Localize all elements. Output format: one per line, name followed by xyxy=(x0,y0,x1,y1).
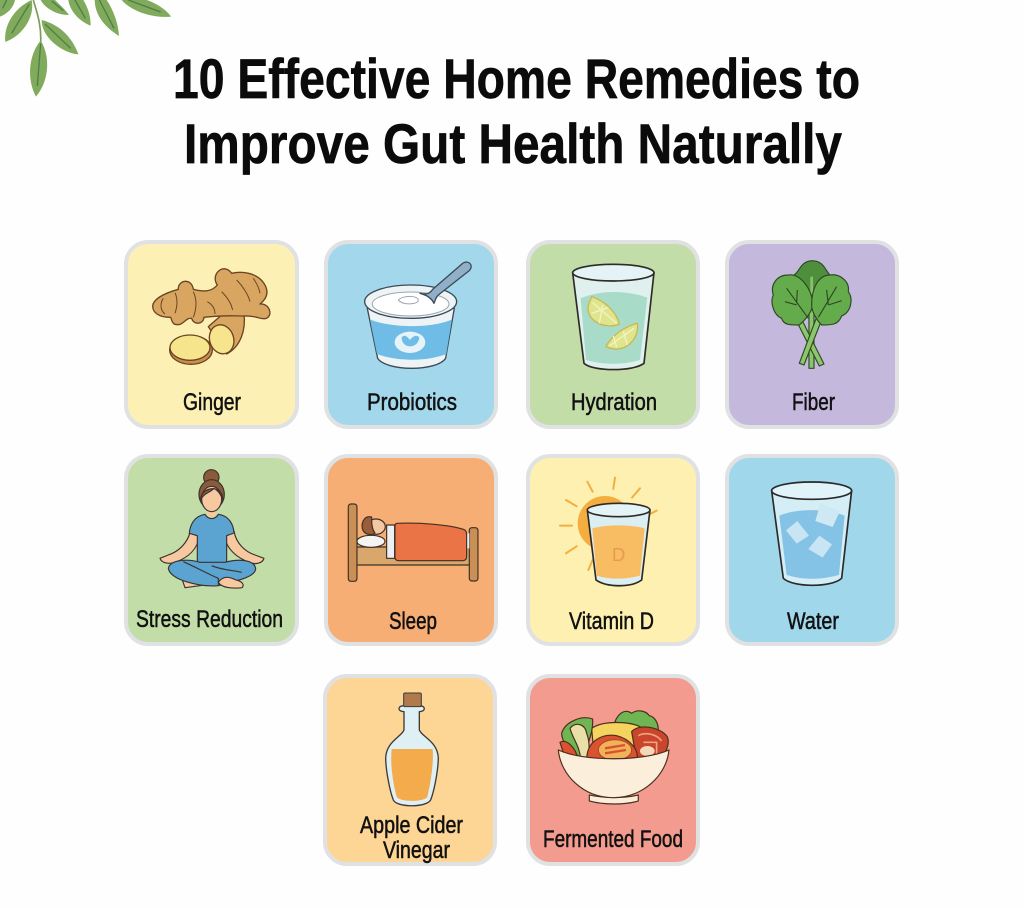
icon: ginger root xyxy=(153,269,270,364)
label: Apple Cider Vinegar: Vinegar xyxy=(383,837,450,864)
label: Fermented Food: Fermented Food xyxy=(543,826,683,853)
panel: hydration xyxy=(528,242,698,427)
panel: stress reduction xyxy=(126,456,297,644)
title: 10 Effective Home Remedies to xyxy=(173,47,860,110)
title: Improve Gut Health Naturally xyxy=(184,112,842,175)
icon: person sleeping in bed xyxy=(348,504,478,581)
panel: probiotics xyxy=(326,242,496,427)
icon: bowl of fermented food xyxy=(558,711,669,804)
label: Sleep: Sleep xyxy=(389,608,437,635)
panel: vitamin d xyxy=(528,456,698,644)
icon: glass of lemon water xyxy=(573,264,654,370)
label: Vitamin D: Vitamin D xyxy=(569,608,654,635)
icon: vinegar bottle xyxy=(386,693,438,806)
icon: sun and glass of juice xyxy=(560,478,657,586)
icon: sun and glass of juice: D xyxy=(612,544,625,565)
icon: yogurt cup with spoon xyxy=(365,262,471,368)
panel: fermented food xyxy=(528,676,698,864)
label: Apple Cider Vinegar xyxy=(360,812,463,864)
label: Fiber: Fiber xyxy=(792,389,835,416)
icon: glass of iced water xyxy=(772,482,852,585)
icon: spinach bunch xyxy=(772,261,851,368)
label: Ginger: Ginger xyxy=(183,389,241,416)
label: Hydration: Hydration xyxy=(571,389,657,416)
icon: leafy branch xyxy=(0,0,171,97)
panel: apple cider vinegar xyxy=(325,676,495,864)
title xyxy=(173,47,860,175)
panel: ginger xyxy=(126,242,297,427)
label: Water: Water xyxy=(787,608,839,635)
label: Apple Cider Vinegar: Apple Cider xyxy=(360,812,463,839)
panel: sleep xyxy=(326,456,496,644)
label: Stress Reduction: Stress Reduction xyxy=(136,606,283,633)
label: Probiotics: Probiotics xyxy=(367,389,457,416)
icon: person meditating xyxy=(160,470,264,588)
panel: fiber xyxy=(727,242,897,427)
panel: water xyxy=(727,456,897,644)
